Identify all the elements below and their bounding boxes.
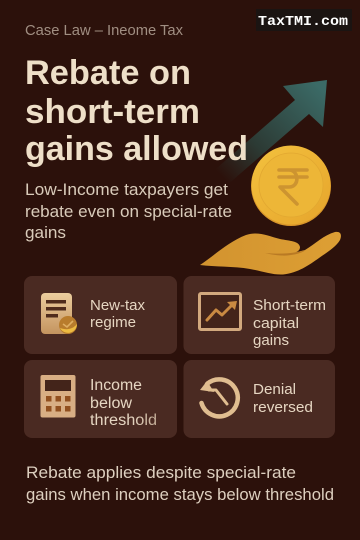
subtitle: rebate even on special-rate [25, 202, 232, 221]
title: Rebate on [25, 54, 191, 92]
icon: rising arrow [210, 80, 327, 186]
icon: rupee coin [251, 146, 331, 226]
title [25, 54, 248, 168]
icon: history clock arrow [200, 379, 238, 416]
panel: income below threshold [24, 360, 177, 438]
icon: chart in frame [200, 294, 240, 330]
label: income below threshold: below [90, 395, 133, 412]
title: gains allowed [25, 130, 248, 168]
subtitle: gains [25, 223, 66, 242]
label: short-term capital gains: gains [253, 332, 289, 349]
subtitle: Low-Income taxpayers get [25, 180, 228, 199]
watermark: TaxTMI.com [256, 9, 352, 31]
label: short-term capital gains: capital [253, 315, 299, 332]
subtitle [25, 180, 232, 242]
label: income below threshold: Income [90, 377, 142, 394]
label: denial reversed: reversed [253, 399, 313, 416]
icon: document with coin [41, 293, 77, 334]
icon: open hand [200, 232, 341, 275]
label: denial reversed [253, 381, 313, 416]
label: income below threshold: threshold [90, 412, 157, 429]
label: new-tax regime [90, 297, 145, 331]
footer text: gains when income stays below threshold [26, 486, 334, 504]
footer text: Rebate applies despite special-rate [26, 464, 296, 482]
label: short-term capital gains: Short-term [253, 297, 326, 314]
panel: new-tax regime [24, 276, 177, 354]
label: short-term capital gains [253, 297, 326, 349]
footer text [26, 464, 334, 504]
label: new-tax regime: New-tax [90, 297, 145, 314]
watermark: TaxTMI.com: TaxTMI.com [258, 14, 348, 30]
panel: short-term capital gains [184, 276, 335, 354]
label: new-tax regime: regime [90, 314, 136, 331]
icon: calculator [40, 375, 76, 418]
title: short-term [25, 93, 200, 131]
category label: Case Law – Ineome Tax [25, 22, 183, 39]
label: denial reversed: Denial [253, 381, 296, 398]
panel: denial reversed [184, 360, 335, 438]
label: income below threshold [90, 377, 157, 429]
